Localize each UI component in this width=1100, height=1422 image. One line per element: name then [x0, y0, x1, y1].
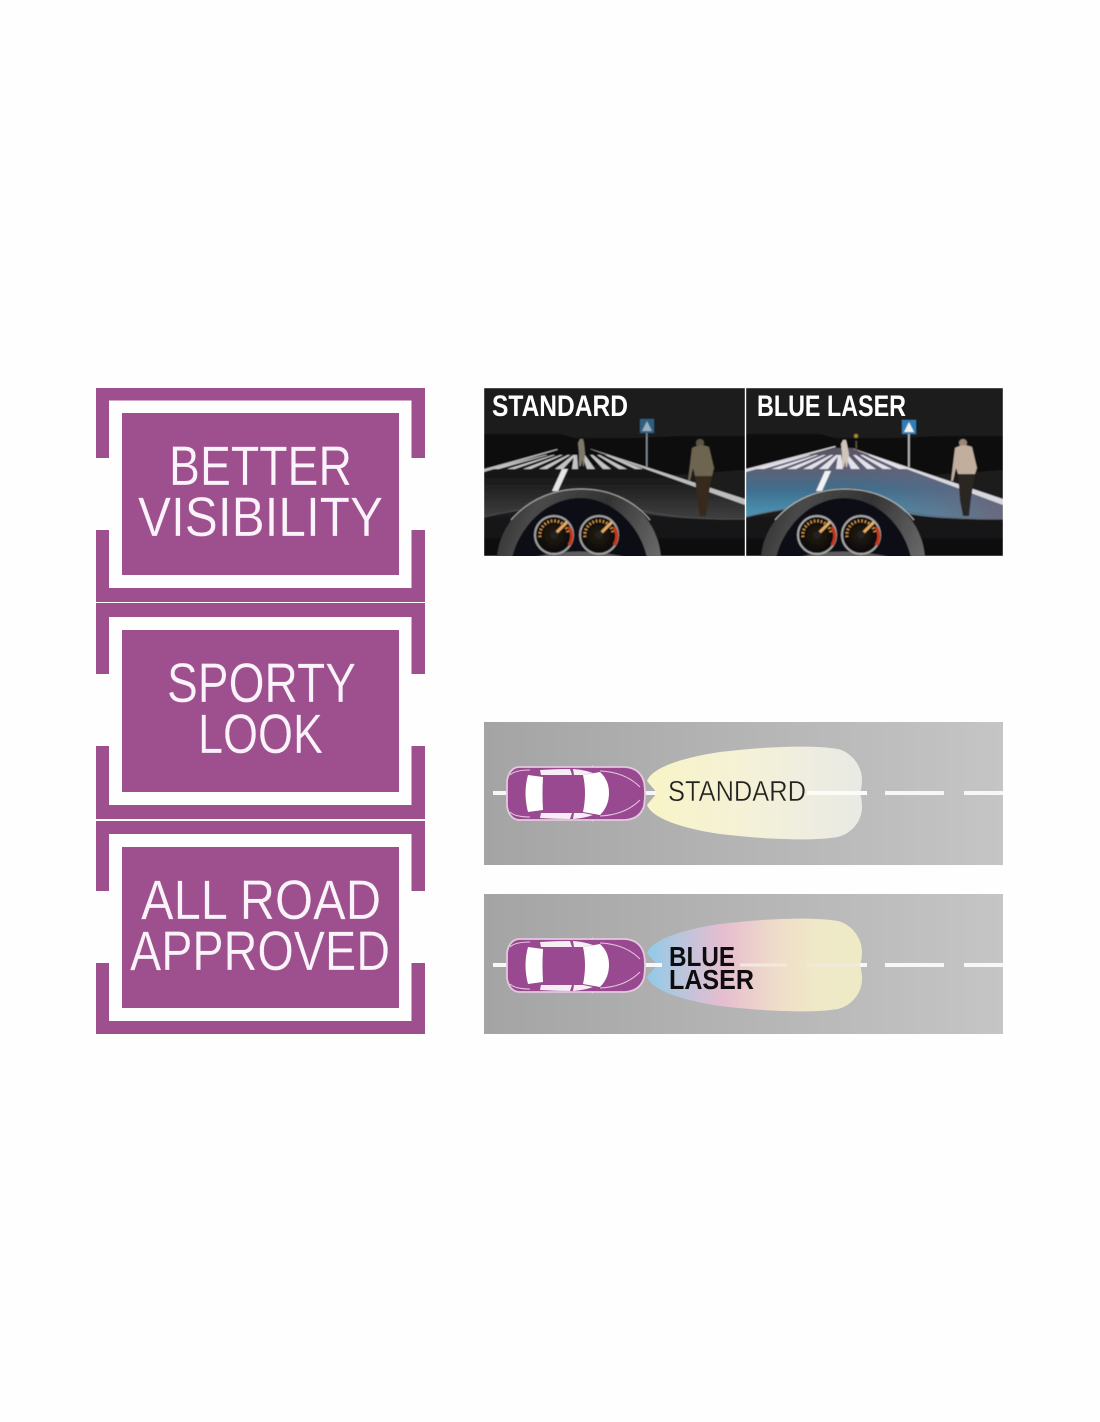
- figure: distant pedestrian: [841, 440, 849, 467]
- label: blue laser beam: [669, 941, 754, 995]
- heading: all road approved: APPROVED: [130, 919, 390, 982]
- photo: standard night view: [484, 388, 745, 558]
- diagram: standard beam on road: [484, 722, 1003, 865]
- heading: better visibility: VISIBILITY: [138, 485, 383, 548]
- panel: sporty look: [96, 603, 425, 819]
- heading: better visibility: BETTER: [169, 434, 352, 497]
- steering wheel: [497, 488, 661, 558]
- road centre line: [493, 791, 1003, 795]
- beam: standard: [647, 747, 862, 839]
- icon: car top view: [507, 937, 645, 994]
- heading: sporty look: SPORTY: [167, 651, 356, 714]
- gauges: [798, 516, 880, 554]
- heading: better visibility: [138, 434, 383, 548]
- label: blue laser beam: LASER: [669, 964, 754, 995]
- beam: blue laser: [647, 919, 862, 1011]
- photo: blue laser night view: [746, 388, 1003, 558]
- heading: sporty look: LOOK: [198, 702, 323, 765]
- label: blue laser beam: BLUE: [669, 941, 735, 972]
- road centre line: [493, 963, 1003, 967]
- heading: sporty look: [167, 651, 356, 765]
- figure: cyclist: [951, 439, 977, 516]
- heading: all road approved: ALL ROAD: [141, 868, 381, 931]
- heading: all road approved: [130, 868, 390, 982]
- label: standard: STANDARD: [492, 390, 628, 423]
- label: blue laser: BLUE LASER: [757, 390, 906, 423]
- icon: car top view: [507, 765, 645, 822]
- label: standard beam: STANDARD: [668, 776, 806, 808]
- steering wheel: [761, 488, 925, 558]
- figure: cyclist: [688, 439, 714, 516]
- diagram: blue laser beam on road: [484, 894, 1003, 1034]
- figure: distant pedestrian: [578, 439, 585, 466]
- panel: better visibility: [96, 388, 425, 602]
- gauges: [535, 516, 618, 554]
- panel: all road approved: [96, 821, 425, 1034]
